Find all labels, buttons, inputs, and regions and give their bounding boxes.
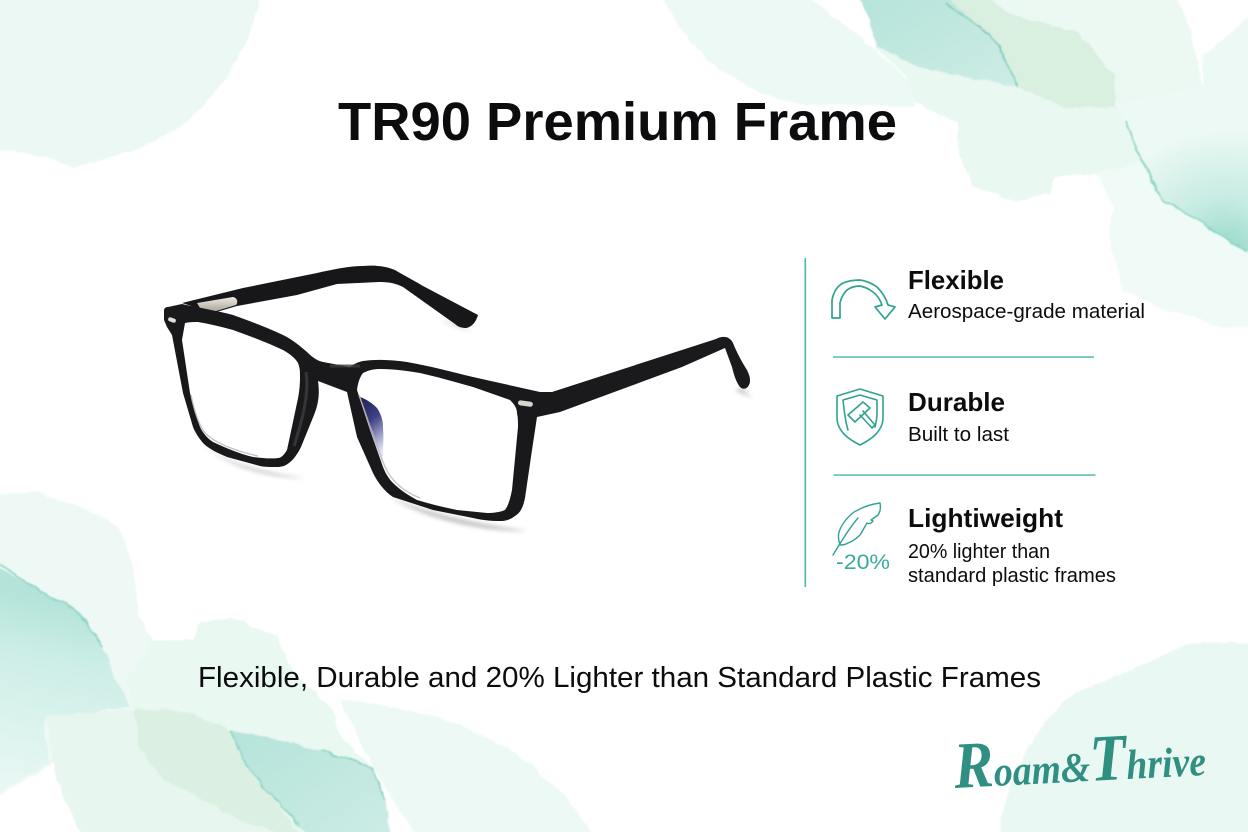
feature: durable heading: Durable: [908, 387, 1005, 417]
watercolor: top left: [0, 0, 262, 168]
watercolor: top right: [657, 0, 1248, 327]
watercolor: bottom left: [0, 493, 596, 832]
icon label: minus twenty percent: -20%: [836, 551, 890, 574]
feature: lightweight text: [908, 541, 1116, 587]
feature: flexible text: Aerospace-grade material: [908, 301, 1145, 323]
brand logo: Roam&Thrive: [951, 717, 1207, 803]
divider two: [834, 474, 1096, 476]
subtitle: Flexible, Durable and 20% Lighter than Standard Plastic Frames: [198, 662, 1041, 694]
glasses photo illustration: [164, 266, 752, 531]
icon: flexible arrow: [832, 280, 895, 319]
icon: feather: [833, 503, 880, 555]
lens edge highlights: [191, 395, 420, 498]
title: TR90 Premium Frame: [338, 92, 897, 152]
features panel: [804, 258, 1145, 587]
rivet left: [168, 317, 176, 323]
rivet right: [518, 400, 533, 407]
frame sheen: [294, 366, 360, 446]
feature: lightweight text: standard plastic frames: [908, 565, 1116, 587]
icon: durable shield: [837, 389, 883, 445]
far temple arm: [182, 266, 478, 328]
front frame: [164, 304, 560, 521]
hinge metal strip: [197, 297, 237, 312]
cast shadow: [203, 320, 752, 531]
near temple arm: [552, 337, 750, 412]
watercolor: bottom right: [1000, 642, 1248, 832]
divider one: [833, 356, 1094, 358]
feature: lightweight heading: Lightiweight: [908, 503, 1063, 533]
blue lens reflection: [360, 397, 383, 463]
vertical accent line: [804, 258, 806, 587]
feature: flexible heading: Flexible: [908, 265, 1004, 295]
feature: durable text: Built to last: [908, 424, 1009, 446]
feature: lightweight text: 20% lighter than: [908, 541, 1050, 563]
